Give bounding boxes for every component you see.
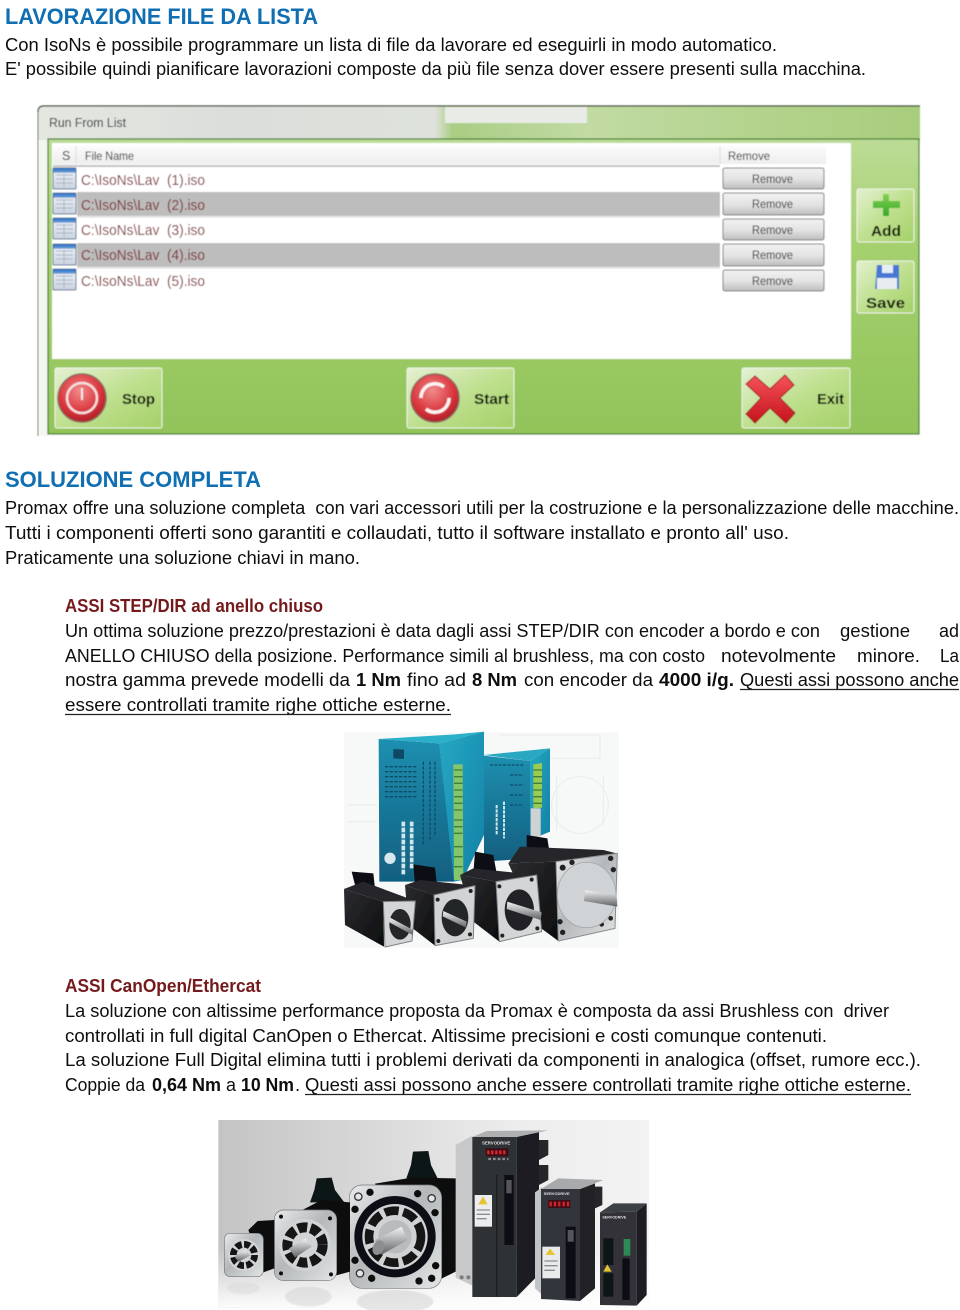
text block: assi canopen/ethercat [65, 1000, 921, 1095]
text block: assi step/dir: con encoder da [524, 669, 654, 690]
text block: assi step/dir: 4000 i/g. [659, 669, 734, 690]
text block: assi canopen/ethercat: Coppie da [65, 1074, 146, 1095]
text block: assi canopen/ethercat: La soluzione Full Digital elimina tutti i problemi derivati da componenti in analogica (offset, rumore ecc.). [65, 1049, 921, 1070]
file list table [52, 143, 851, 359]
text block: soluzione completa [5, 497, 959, 568]
motor: smallest stepper [344, 872, 415, 947]
row 2: C:\IsoNs\Lav (2).iso [81, 198, 205, 214]
icon: floppy disk [875, 265, 899, 289]
button: Exit: Exit [817, 392, 844, 408]
icon: green plus [873, 194, 900, 216]
heading: Soluzione completa: SOLUZIONE COMPLETA [5, 467, 261, 492]
button: Save [857, 261, 914, 313]
text block: assi canopen/ethercat: 0,64 Nm [152, 1074, 221, 1095]
icon: red cross [746, 375, 795, 423]
remove buttons column: Remove [752, 223, 793, 237]
table header: S [62, 149, 70, 163]
text block: assi canopen/ethercat: . [295, 1074, 300, 1095]
text block: assi step/dir: notevolmente [721, 645, 836, 666]
image: brushless motors and servo drives [218, 1120, 649, 1310]
button: Stop [55, 368, 162, 428]
row 5 [53, 269, 205, 290]
row 5: C:\IsoNs\Lav (5).iso [81, 274, 205, 290]
text block: assi step/dir: essere controllati tramite righe ottiche esterne. [65, 694, 451, 715]
text block: assi step/dir: 1 Nm [356, 669, 401, 690]
table header: File Name [85, 149, 134, 163]
drive: large HBS86H [379, 732, 484, 882]
text block: assi step/dir: Questi assi possono anche [740, 669, 959, 690]
text block: assi step/dir: La [940, 645, 960, 666]
text block: assi step/dir: ANELLO CHIUSO della posizione. Performance simili al brushless, ma con costo [65, 645, 705, 666]
remove buttons column: Remove [752, 172, 793, 186]
servo drive: small [600, 1203, 647, 1306]
row 2 [53, 192, 720, 216]
text block: assi step/dir: nostra gamma prevede modelli da [65, 669, 351, 690]
button: Add [857, 189, 914, 242]
text block: soluzione completa: Praticamente una soluzione chiavi in mano. [5, 547, 360, 568]
image: step/dir drives and stepper motors [344, 732, 619, 948]
row 4 [53, 243, 720, 267]
text block: assi canopen/ethercat: a [226, 1074, 237, 1095]
servo drive: medium [535, 1178, 603, 1301]
table header: Remove [728, 149, 770, 163]
button: Save: Save [866, 296, 905, 312]
window title bar: Run From List [49, 116, 127, 130]
text block: assi canopen/ethercat: controllati in full digital CanOpen o Ethercat. Altissime precisioni e costi comunque contenuti. [65, 1025, 827, 1046]
button: Stop: Stop [122, 392, 155, 408]
drive: small HBS57 [484, 748, 550, 862]
motor: third stepper [460, 852, 542, 942]
icon: red refresh circle [411, 374, 459, 422]
text block: assi step/dir: minore. [857, 645, 920, 666]
row 3 [53, 218, 205, 239]
remove buttons column: Remove [752, 197, 793, 211]
table header [53, 146, 826, 167]
text block: assi canopen/ethercat: La soluzione con altissime performance proposta da Promax è composta da assi Brushless con driver [65, 1000, 889, 1021]
motor: medium brushless [274, 1178, 350, 1281]
button: Exit [742, 368, 850, 428]
remove buttons column [723, 168, 824, 291]
subheading: Assi CanOpen/Ethercat: ASSI CanOpen/Ethercat [65, 975, 261, 996]
row 4: C:\IsoNs\Lav (4).iso [81, 248, 205, 264]
text block: assi step/dir: Un ottima soluzione prezzo/prestazioni è data dagli assi STEP/DIR con encoder a bordo e con [65, 620, 820, 641]
intro text block: E' possibile quindi pianificare lavorazioni composte da più file senza dover essere presenti sulla macchina. [5, 58, 866, 79]
remove buttons column: Remove [752, 274, 793, 288]
servo drive: small: SERVODRIVE [602, 1215, 627, 1219]
intro text block: Con IsoNs è possibile programmare un lista di file da lavorare ed eseguirli in modo automatico. [5, 34, 777, 55]
text block: soluzione completa: Promax offre una soluzione completa con vari accessori utili per la costruzione e la personalizzazione delle macchine. [5, 497, 959, 518]
reflections on floor [227, 1282, 433, 1310]
text block: soluzione completa: Tutti i componenti offerti sono garantiti e collaudati, tutto il software installato e pronto all' uso. [5, 522, 789, 543]
button: Add: Add [871, 224, 901, 240]
motor: large brushless [349, 1151, 456, 1288]
row 1 [53, 167, 205, 191]
servo drive: large: SERVODRIVE [482, 1140, 510, 1145]
window title bar [38, 106, 920, 436]
servo drive: large [456, 1130, 548, 1297]
motor: small brushless [224, 1220, 274, 1277]
button: Start: Start [474, 392, 509, 408]
remove buttons column: Remove [752, 248, 793, 262]
text block: assi step/dir: 8 Nm [472, 669, 517, 690]
text block: assi step/dir: fino ad [407, 669, 466, 690]
intro text block [5, 34, 866, 79]
row 1: C:\IsoNs\Lav (1).iso [81, 173, 205, 189]
panel: Run From List software window [38, 106, 920, 436]
row 3: C:\IsoNs\Lav (3).iso [81, 223, 205, 239]
text block: assi canopen/ethercat: 10 Nm [241, 1074, 294, 1095]
motor: largest silver flange [508, 835, 617, 941]
text block: assi step/dir [65, 620, 960, 715]
icon: red power circle [58, 374, 106, 422]
motor: second stepper [405, 864, 475, 946]
button: Start [407, 368, 514, 428]
heading: Lavorazione file da lista: LAVORAZIONE FILE DA LISTA [5, 4, 318, 29]
text block: assi canopen/ethercat: Questi assi possono anche essere controllati tramite righe ottiche esterne. [305, 1074, 911, 1095]
subheading: Assi STEP/DIR: ASSI STEP/DIR ad anello chiuso [65, 595, 323, 616]
text block: assi step/dir: gestione [840, 620, 910, 641]
servo drive: medium: SERVODRIVE [544, 1191, 570, 1196]
text block: assi step/dir: ad [939, 620, 959, 641]
